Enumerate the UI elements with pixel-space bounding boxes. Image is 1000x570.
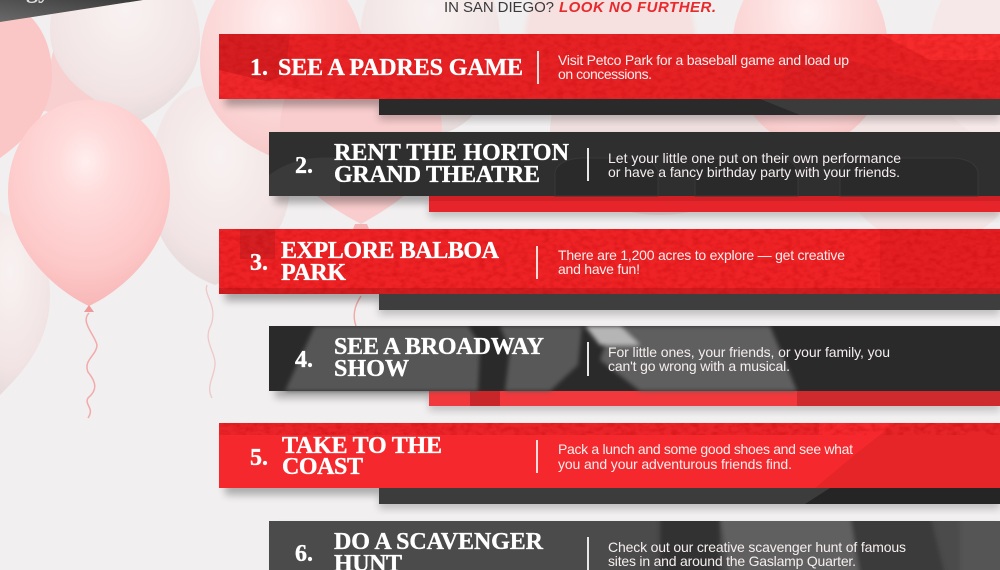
balloons cluster — [0, 0, 1000, 418]
panel: item 4 — [269, 326, 1000, 411]
panel: item 3: EXPLORE BALBOA — [281, 238, 500, 264]
panel: item 2 — [269, 132, 1000, 217]
panel: item 5 — [219, 423, 1000, 509]
panel: item 1: 1. — [250, 55, 268, 81]
panel: item 6 — [269, 521, 1000, 570]
panel: item 2: 2. — [295, 153, 313, 179]
panel: item 3 — [219, 229, 1000, 315]
panel: item 4: SHOW — [334, 356, 409, 382]
panel: item 2: GRAND THEATRE — [334, 162, 540, 188]
panel: item 2: Let your little one put on their own performance — [608, 150, 901, 166]
panel: item 5: TAKE TO THE — [282, 433, 442, 459]
panel: item 4: can't go wrong with a musical. — [608, 358, 790, 374]
panel: item 3: PARK — [281, 260, 346, 286]
panel: item 5: COAST — [282, 454, 363, 480]
panel: item 1 — [219, 34, 1000, 120]
panel: item 1: SEE A PADRES GAME — [278, 55, 523, 81]
panel: item 2: or have a fancy birthday party with your friends. — [608, 164, 900, 180]
panel: item 4: SEE A BROADWAY — [334, 334, 544, 360]
panel: item 1: Visit Petco Park for a baseball game and load up — [558, 52, 849, 68]
panel: item 4: For little ones, your friends, or your family, you — [608, 344, 890, 360]
panel: item 6: Check out our creative scavenger hunt of famous — [608, 539, 906, 555]
panel: item 5: Pack a lunch and some good shoes and see what — [558, 441, 853, 457]
panel: item 3: There are 1,200 acres to explore — get creative — [558, 247, 845, 263]
panel: item 2: RENT THE HORTON — [334, 140, 570, 166]
panel: item 6: DO A SCAVENGER — [334, 529, 544, 555]
panel: item 3: 3. — [250, 250, 268, 276]
panel: item 1: on concessions. — [558, 66, 652, 82]
panel: item 6: sites in and around the Gaslamp Quarter. — [608, 553, 856, 569]
panel: item 4: 4. — [295, 347, 313, 373]
intro line — [444, 0, 716, 16]
panel: item 6: 6. — [295, 541, 313, 567]
panel: item 3: and have fun! — [558, 261, 640, 277]
panel: item 5: you and your adventurous friends find. — [558, 456, 792, 472]
panel: item 5: 5. — [250, 445, 268, 471]
top-left ribbon — [0, 0, 143, 22]
